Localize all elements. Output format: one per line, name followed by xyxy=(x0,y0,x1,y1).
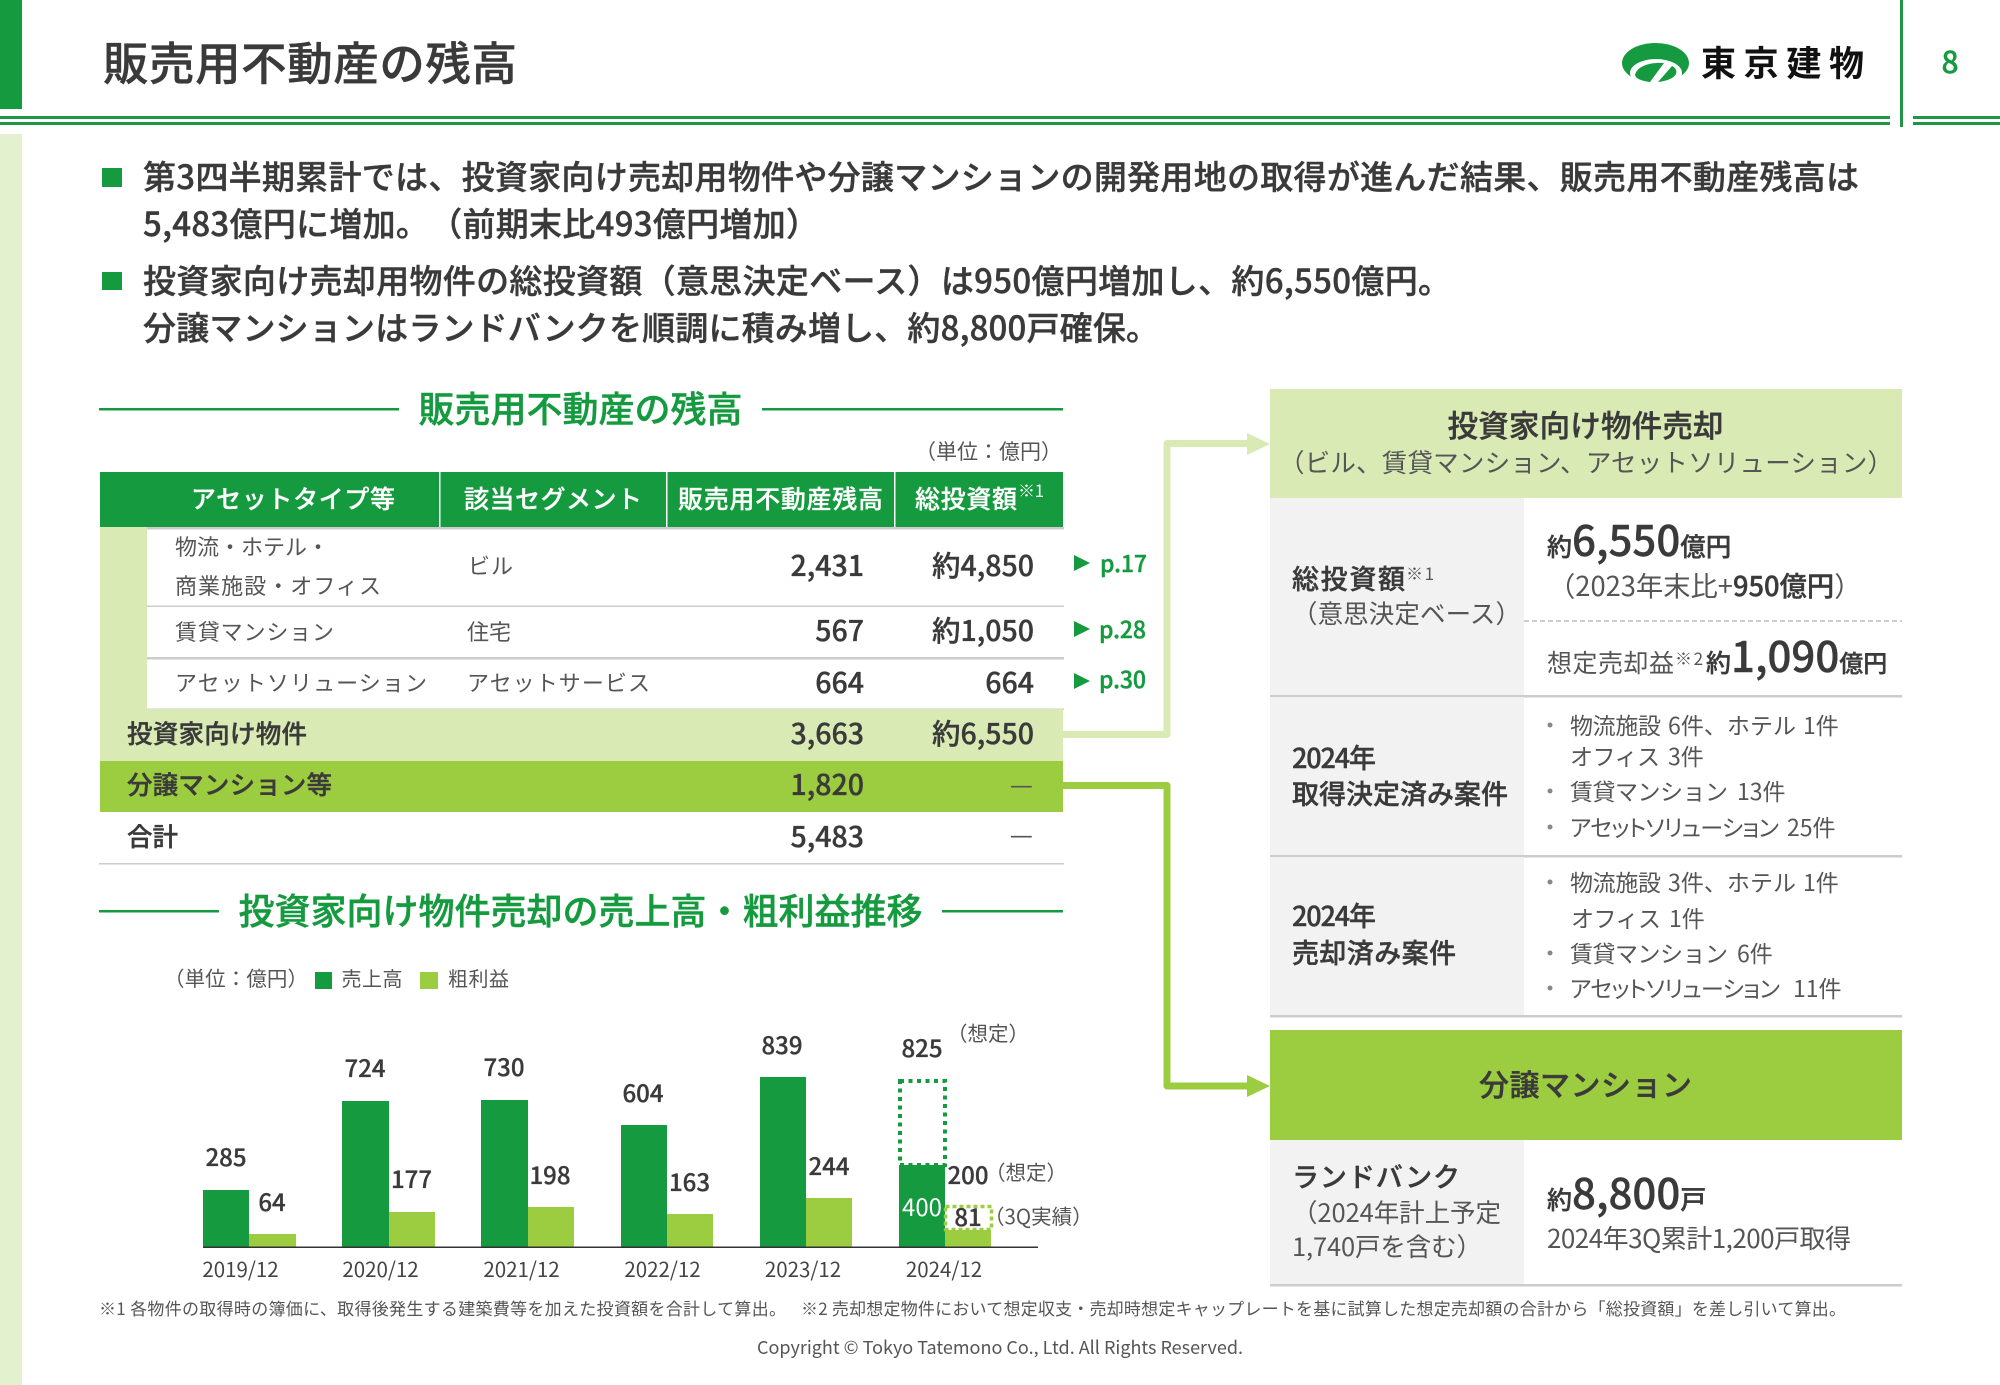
row: total investment: 約1,090億円 xyxy=(1706,624,1887,685)
row: asset solutions: 664 xyxy=(985,661,1034,702)
bars 2020/12: 724 xyxy=(344,1049,386,1084)
arrow: investor properties to investor sales panel xyxy=(1063,433,1270,734)
row: rental apartments: 住宅 xyxy=(467,615,511,647)
bars 2021/12: 2021/12 xyxy=(483,1253,560,1283)
bars 2022/12: 604 xyxy=(622,1074,664,1109)
bars 2024/12 with forecast: 81 xyxy=(954,1198,982,1233)
row: 2024 acquisitions decided: オフィス xyxy=(1570,738,1660,772)
bars 2023/12 xyxy=(760,1026,852,1283)
bars 2023/12: 2023/12 xyxy=(765,1253,841,1283)
row: condominiums: 分譲マンション等 xyxy=(127,765,332,802)
summary bullets: 第3四半期累計では、投資家向け売却用物件や分譲マンションの開発用地の取得が進んだ結果、販売用不動産残高は xyxy=(143,151,1859,199)
row: 2024 sold properties: オフィス xyxy=(1571,900,1661,934)
row: 2024 sold properties: 2024年 xyxy=(1292,895,1376,934)
panel heading: （ビル、賃貸マンション、アセットソリューション） xyxy=(1279,443,1893,480)
row: logistics, hotel, commercial, office: 約4,850 xyxy=(932,544,1034,585)
panel: condominiums xyxy=(1270,1030,1902,1286)
panel: investor property sales xyxy=(1270,389,1902,1018)
row: 2024 acquisitions decided: アセットソリューション xyxy=(1570,809,1779,843)
row: 2024 sold properties: 売却済み案件 xyxy=(1292,932,1456,971)
row: asset solutions: アセットソリューション xyxy=(175,666,427,698)
row: total xyxy=(127,815,1033,856)
balance table xyxy=(99,472,1147,864)
row: 2024 sold properties: アセットソリューション xyxy=(1570,970,1780,1004)
chart legend: （単位：億円） xyxy=(164,962,308,992)
row: 2024 acquisitions decided: 物流施設 xyxy=(1570,707,1661,741)
chart baseline xyxy=(203,1246,1038,1248)
footnotes: ※1 各物件の取得時の簿価に、取得後発生する建築費等を加えた投資額を合計して算出。 xyxy=(99,1295,786,1320)
bars 2019/12: 64 xyxy=(258,1183,286,1218)
row: 2024 acquisitions decided: 3件 xyxy=(1668,738,1704,772)
row: asset solutions: アセットサービス xyxy=(467,666,650,698)
bars 2024/12 with forecast: 200 xyxy=(947,1156,989,1191)
bars 2024/12 with forecast: （想定） xyxy=(985,1156,1067,1186)
bars 2023/12: 839 xyxy=(761,1026,803,1061)
panel heading xyxy=(1270,1030,1902,1140)
summary bullets: 投資家向け売却用物件の総投資額（意思決定ベース）は950億円増加し、約6,550億円。 xyxy=(143,255,1451,303)
chart legend: 売上高 xyxy=(342,963,402,992)
row: 2024 sold properties: 6件 xyxy=(1737,935,1773,969)
summary bullets: 分譲マンションはランドバンクを順調に積み増し、約8,800戸確保。 xyxy=(143,302,1159,350)
row: logistics, hotel, commercial, office: 物流・ホテル・ xyxy=(175,530,329,562)
table rows background xyxy=(99,527,1064,864)
row: investor properties subtotal: 約6,550 xyxy=(932,712,1034,753)
row: logistics, hotel, commercial, office: 2,431 xyxy=(791,544,864,585)
row: 2024 acquisitions decided: 25件 xyxy=(1787,809,1836,843)
table header row: ※1 xyxy=(1018,477,1044,502)
row: 2024 acquisitions decided: 取得決定済み案件 xyxy=(1292,773,1508,812)
row: logistics, hotel, commercial, office xyxy=(175,530,1147,601)
summary bullets xyxy=(102,151,1859,350)
bars 2019/12: 2019/12 xyxy=(202,1253,279,1283)
panel heading: 分譲マンション xyxy=(1479,1061,1692,1105)
section heading: balance table: 販売用不動産の残高 xyxy=(418,381,742,433)
panel heading: 投資家向け物件売却 xyxy=(1448,402,1724,446)
bars 2020/12: 2020/12 xyxy=(342,1253,419,1283)
row: rental apartments xyxy=(175,609,1146,650)
row: land bank: 1,740戸を含む） xyxy=(1292,1227,1482,1264)
bars 2019/12 xyxy=(202,1138,296,1283)
row: land bank: （2024年計上予定 xyxy=(1292,1193,1501,1230)
row: 2024 sold properties: 3件、ホテル xyxy=(1668,864,1796,898)
table header row xyxy=(100,472,1063,527)
row: logistics, hotel, commercial, office: 商業施設・オフィス xyxy=(175,569,381,601)
bars 2020/12 xyxy=(342,1049,435,1283)
bars 2021/12: 198 xyxy=(529,1156,571,1191)
row: total investment xyxy=(1270,498,1902,698)
table header row: アセットタイプ等 xyxy=(191,480,395,516)
row: 2024 acquisitions decided: 2024年 xyxy=(1292,737,1376,776)
row: 2024 sold properties: 11件 xyxy=(1793,970,1842,1004)
table header row: 該当セグメント xyxy=(464,480,642,516)
row: 2024 sold properties: 1件 xyxy=(1803,864,1839,898)
row: 2024 sold properties: 賃貸マンション xyxy=(1570,935,1728,969)
row: investor properties subtotal: 投資家向け物件 xyxy=(127,714,307,751)
row: 2024 sold properties xyxy=(1270,857,1902,1018)
panel heading xyxy=(1270,389,1902,498)
row: rental apartments: p.28 xyxy=(1099,611,1146,645)
row: land bank: 約8,800戸 xyxy=(1547,1161,1706,1222)
row: rental apartments: 約1,050 xyxy=(932,609,1034,650)
row: asset solutions: 664 xyxy=(815,661,864,702)
logo: Tokyo Tatemono xyxy=(1622,36,1864,87)
table header row: 総投資額 xyxy=(915,480,1017,516)
row: total investment: ※2 xyxy=(1675,645,1703,670)
bars 2024/12 with forecast: （3Q実績） xyxy=(984,1200,1093,1230)
bars 2021/12: 730 xyxy=(483,1048,525,1083)
row: 2024 acquisitions decided: 6件、ホテル xyxy=(1668,707,1796,741)
row: 2024 acquisitions decided: 賃貸マンション xyxy=(1570,773,1728,807)
bars 2019/12: 285 xyxy=(205,1138,247,1173)
row: total investment: 想定売却益 xyxy=(1547,644,1674,680)
table unit: （単位：億円） xyxy=(915,436,1062,466)
bars 2023/12: 244 xyxy=(808,1147,850,1182)
row: investor properties subtotal: 3,663 xyxy=(791,712,864,753)
bars 2022/12 xyxy=(621,1074,713,1283)
row: 2024 sold properties: 物流施設 xyxy=(1570,864,1661,898)
row: total: 5,483 xyxy=(791,815,864,856)
row: land bank xyxy=(1270,1140,1902,1286)
copyright: Copyright © Tokyo Tatemono Co., Ltd. All Rights Reserved. xyxy=(757,1334,1243,1360)
row: total investment: （2023年末比+950億円） xyxy=(1548,564,1862,604)
bars 2022/12: 163 xyxy=(669,1163,710,1198)
section heading: sales and gross profit trend: 投資家向け物件売却の売上高・粗利益推移 xyxy=(238,883,922,935)
bars 2024/12 with forecast: 400 xyxy=(902,1188,942,1223)
row: condominiums: 1,820 xyxy=(791,763,864,804)
row: 2024 acquisitions decided: 13件 xyxy=(1737,773,1786,807)
arrow: condominiums to condominium panel xyxy=(1063,786,1270,1097)
row: 2024 acquisitions decided xyxy=(1270,697,1902,858)
logo: Tokyo Tatemono: 東京建物 xyxy=(1701,36,1864,87)
bars 2024/12 with forecast xyxy=(899,1017,1093,1283)
row: total investment: 約6,550億円 xyxy=(1547,508,1731,569)
bars 2021/12 xyxy=(481,1048,574,1283)
page number: 8 xyxy=(1941,38,1959,82)
bars 2022/12: 2022/12 xyxy=(624,1253,701,1283)
row: logistics, hotel, commercial, office: p.17 xyxy=(1100,545,1147,579)
row: 2024 sold properties: 1件 xyxy=(1669,900,1705,934)
summary bullets: 5,483億円に増加。（前期末比493億円増加） xyxy=(143,198,819,246)
chart legend xyxy=(164,962,509,992)
row: total investment: ※1 xyxy=(1406,560,1434,585)
row: rental apartments: 567 xyxy=(815,609,864,650)
row: 2024 acquisitions decided: 1件 xyxy=(1803,707,1839,741)
bars 2024/12 with forecast: （想定） xyxy=(947,1017,1029,1047)
row: condominiums xyxy=(127,763,1033,804)
title: 販売用不動産の残高 xyxy=(103,28,517,94)
row: asset solutions: p.30 xyxy=(1099,661,1146,695)
row: land bank: ランドバンク xyxy=(1292,1156,1460,1195)
row: asset solutions xyxy=(175,661,1146,702)
bar chart xyxy=(202,1017,1093,1283)
row: total investment: 総投資額 xyxy=(1292,558,1405,597)
row: total: — xyxy=(1010,815,1033,852)
footnotes xyxy=(99,1295,1846,1320)
chart legend: 粗利益 xyxy=(448,963,509,992)
bars 2020/12: 177 xyxy=(391,1160,432,1195)
row: investor properties subtotal xyxy=(127,712,1034,753)
row: total: 合計 xyxy=(127,817,178,854)
row: condominiums: — xyxy=(1010,765,1033,802)
row: total investment: （意思決定ベース） xyxy=(1292,594,1521,631)
bars 2024/12 with forecast: 2024/12 xyxy=(906,1253,982,1283)
table header row: 販売用不動産残高 xyxy=(678,480,883,516)
row: logistics, hotel, commercial, office: ビル xyxy=(468,549,513,581)
bars 2024/12 with forecast: 825 xyxy=(901,1029,943,1064)
row: rental apartments: 賃貸マンション xyxy=(175,615,334,647)
footnotes: ※2 売却想定物件において想定収支・売却時想定キャップレートを基に試算した想定売却額の合計から「総投資額」を差し引いて算出。 xyxy=(801,1295,1846,1320)
row: land bank: 2024年3Q累計1,200戸取得 xyxy=(1547,1219,1851,1256)
